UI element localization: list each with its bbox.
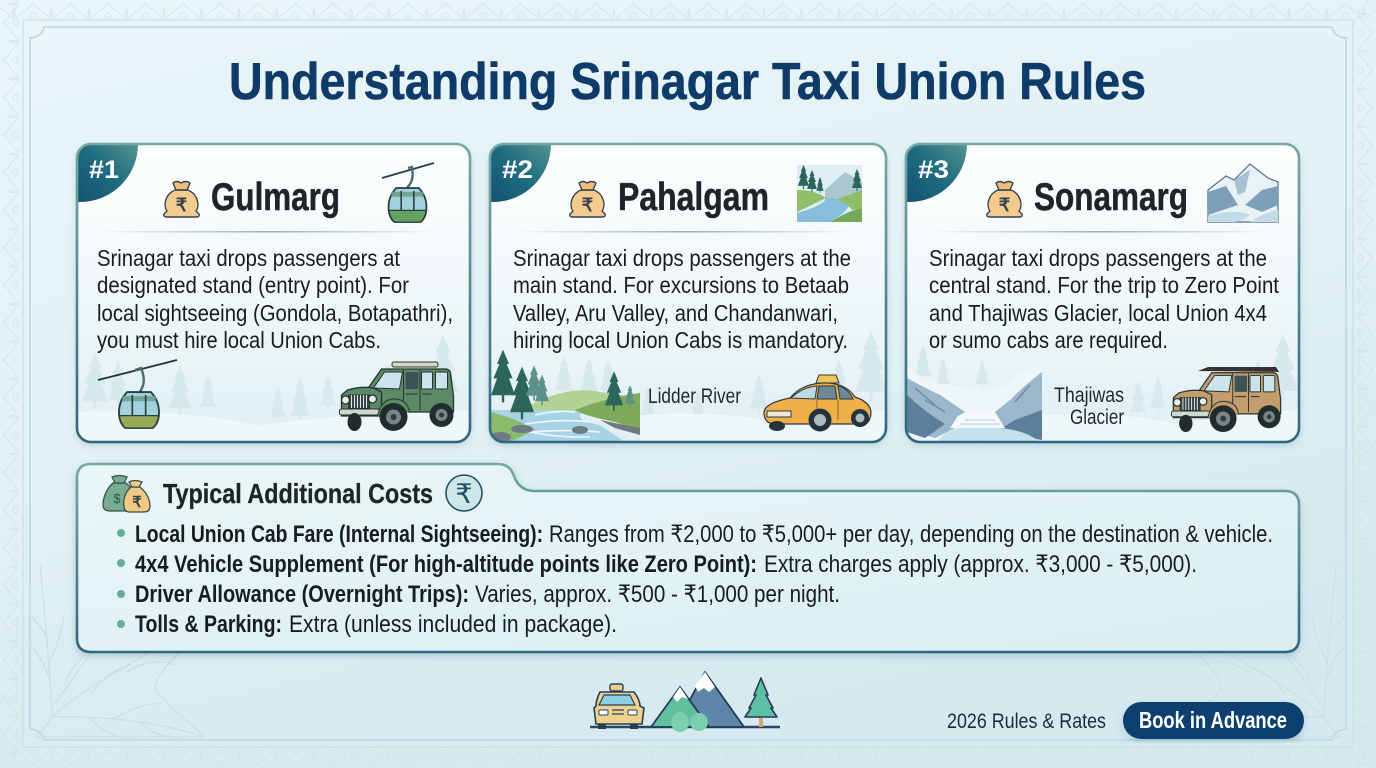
illustration: Lidder River scene (489, 350, 640, 442)
caption: Thajiwas Glacier (1054, 384, 1124, 429)
list item: driver allowance (117, 581, 840, 608)
icon: money bag (987, 182, 1022, 217)
text block: Sonamarg rule: Srinagar taxi drops passengers at the (929, 245, 1267, 271)
list item: 4x4 vehicle supplement (117, 551, 1197, 578)
text block: Sonamarg rule: central stand. For the trip to Zero Point (929, 272, 1279, 298)
text block: Sonamarg rule: or sumo cabs are required. (929, 327, 1168, 353)
panel: typical additional costs (77, 464, 1299, 652)
illustration: Thajiwas Glacier (907, 366, 1042, 442)
text block: Gulmarg rule (97, 245, 453, 353)
icon: money bags: ₹ (132, 494, 142, 511)
badge: #1 (78, 145, 138, 202)
icon: rupee coin: ₹ (455, 479, 473, 509)
badge: #2 (491, 145, 551, 202)
text block: Pahalgam rule: Valley, Aru Valley, and Chandanwari, (513, 300, 838, 326)
text block: Gulmarg rule: you must hire local Union Cabs. (97, 327, 381, 353)
text block: Gulmarg rule: designated stand (entry point). For (97, 272, 409, 298)
icon: money bag: ₹ (582, 195, 594, 215)
icon: money bags (103, 476, 150, 512)
icon: money bag: ₹ (999, 195, 1011, 215)
list item: local union cab fare (117, 521, 1273, 548)
heading: Gulmarg: Gulmarg (211, 176, 340, 219)
icon: tan 4x4 jeep (1171, 367, 1281, 432)
footer label: 2026 Rules & Rates (947, 710, 1106, 733)
heading: Pahalgam: Pahalgam (618, 176, 769, 219)
text block: Pahalgam rule: Srinagar taxi drops passengers at the (513, 245, 851, 271)
icon: cable car (382, 163, 434, 222)
icon: gondola over snow (98, 360, 177, 428)
heading: typical additional costs: Typical Additional Costs (163, 478, 433, 509)
list item: 4x4 vehicle supplement: Extra charges apply (approx. ₹3,000 - ₹5,000). (764, 551, 1197, 578)
icon: snowy mountains (1208, 164, 1278, 222)
decorative leaf bottom right (1171, 565, 1346, 738)
list item: 4x4 vehicle supplement: 4x4 Vehicle Supplement (For high-altitude points like Zero Point): (135, 551, 757, 578)
button: book in advance: Book in Advance (1139, 707, 1287, 733)
list item: tolls and parking (117, 611, 617, 638)
badge: #2: #2 (502, 156, 533, 184)
icon: yellow taxi (764, 375, 871, 432)
text block: Gulmarg rule: Srinagar taxi drops passengers at (97, 245, 400, 271)
caption: Thajiwas Glacier: Glacier (1070, 406, 1124, 429)
list: cost items (117, 521, 1273, 638)
badge: #3 (907, 145, 967, 202)
icon: taxi, mountains and tree emblem (590, 672, 780, 732)
icon: green union jeep (340, 362, 454, 431)
panel: Gulmarg (74, 142, 473, 448)
button: book in advance (1123, 702, 1304, 739)
list item: driver allowance: Driver Allowance (Overnight Trips): (135, 581, 469, 608)
icon: money bag (570, 182, 605, 217)
caption: Thajiwas Glacier: Thajiwas (1054, 384, 1124, 407)
heading: Sonamarg: Sonamarg (1034, 176, 1188, 219)
list item: driver allowance: Varies, approx. ₹500 - ₹1,000 per night. (475, 581, 840, 608)
title: Understanding Srinagar Taxi Union Rules (229, 53, 1146, 111)
panel: Pahalgam (487, 142, 889, 448)
text block: Sonamarg rule (929, 245, 1279, 353)
text block: Pahalgam rule: hiring local Union Cabs is mandatory. (513, 327, 848, 353)
text block: Pahalgam rule: main stand. For excursions to Betaab (513, 272, 849, 298)
decorative leaf bottom left (30, 565, 205, 738)
text block: Sonamarg rule: and Thajiwas Glacier, local Union 4x4 (929, 300, 1267, 326)
panel: Sonamarg (903, 142, 1302, 448)
text block: Pahalgam rule (513, 245, 851, 353)
list item: tolls and parking: Tolls & Parking: (135, 611, 282, 638)
badge: #3: #3 (918, 156, 949, 184)
text block: Gulmarg rule: local sightseeing (Gondola, Botapathri), (97, 300, 453, 326)
icon: river valley (797, 165, 862, 222)
caption: Lidder River: Lidder River (648, 385, 741, 408)
list item: local union cab fare: Local Union Cab Fare (Internal Sightseeing): (135, 521, 543, 548)
icon: rupee coin (446, 475, 482, 511)
icon: money bags: $ (113, 491, 121, 506)
badge: #1: #1 (89, 156, 119, 184)
list item: tolls and parking: Extra (unless included in package). (289, 611, 617, 638)
icon: money bag (164, 182, 199, 217)
icon: money bag: ₹ (176, 195, 188, 215)
